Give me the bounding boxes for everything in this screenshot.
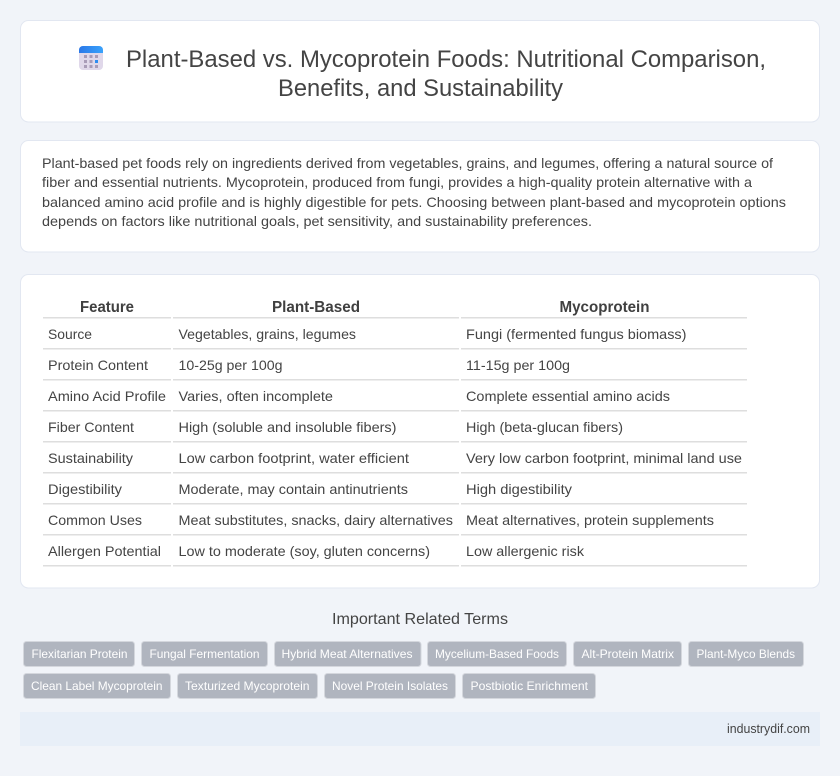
row: sustainability: Very low carbon footprint, minimal land use bbox=[466, 450, 742, 466]
title: Plant-Based vs. Mycoprotein Foods: Nutritional Comparison, bbox=[126, 46, 766, 73]
row: protein content bbox=[48, 357, 570, 373]
row: fiber content: Fiber Content bbox=[48, 419, 134, 435]
table header: Plant-Based bbox=[272, 299, 360, 316]
row: source: Fungi (fermented fungus biomass) bbox=[466, 326, 686, 342]
panel: title header bbox=[20, 20, 820, 122]
row: source: Source bbox=[48, 326, 92, 342]
related term chips: Clean Label Mycoprotein bbox=[31, 679, 162, 693]
related term chips: Mycelium-Based Foods bbox=[435, 647, 559, 661]
row: common uses bbox=[48, 512, 714, 528]
title bbox=[126, 46, 766, 102]
row: sustainability: Low carbon footprint, water efficient bbox=[178, 450, 409, 466]
row: common uses: Meat alternatives, protein supplements bbox=[466, 512, 714, 528]
row: sustainability: Sustainability bbox=[48, 450, 133, 466]
row: protein content: 11-15g per 100g bbox=[466, 357, 570, 373]
row: amino acid profile: Amino Acid Profile bbox=[48, 388, 166, 404]
row: source: Vegetables, grains, legumes bbox=[178, 326, 356, 342]
title: Benefits, and Sustainability bbox=[278, 75, 563, 102]
table header: Feature bbox=[80, 299, 134, 316]
table header bbox=[80, 299, 650, 316]
row: fiber content: High (soluble and insoluble fibers) bbox=[178, 419, 396, 435]
row: digestibility: High digestibility bbox=[466, 481, 572, 497]
row: common uses: Meat substitutes, snacks, dairy alternatives bbox=[178, 512, 453, 528]
row: protein content: Protein Content bbox=[48, 357, 148, 373]
row: common uses: Common Uses bbox=[48, 512, 142, 528]
related term chips: Fungal Fermentation bbox=[150, 647, 260, 661]
row: allergen potential: Low allergenic risk bbox=[466, 543, 585, 559]
related term chips: Texturized Mycoprotein bbox=[185, 679, 310, 693]
row: amino acid profile: Varies, often incomplete bbox=[178, 388, 333, 404]
row: amino acid profile bbox=[48, 388, 670, 404]
row: fiber content bbox=[48, 419, 623, 435]
related term chips: Hybrid Meat Alternatives bbox=[282, 647, 412, 661]
related term chips: Flexitarian Protein bbox=[32, 647, 128, 661]
panel: comparison table bbox=[20, 274, 820, 588]
related term chips bbox=[24, 642, 804, 698]
row: digestibility bbox=[48, 481, 572, 497]
footer bar: industrydif.com bbox=[727, 721, 810, 736]
icon: calendar bbox=[79, 46, 103, 70]
row: digestibility: Moderate, may contain antinutrients bbox=[178, 481, 408, 497]
footer bar bbox=[20, 712, 820, 746]
row: sustainability bbox=[48, 450, 742, 466]
related term chips: Alt-Protein Matrix bbox=[582, 647, 674, 661]
row: digestibility: Digestibility bbox=[48, 481, 122, 497]
intro paragraph: depends on factors like nutritional goals, pet sensitivity, and sustainability preferences. bbox=[42, 213, 592, 229]
row: protein content: 10-25g per 100g bbox=[178, 357, 282, 373]
intro paragraph: fiber and essential nutrients. Mycoprotein, produced from fungi, provides a high-quality protein alternative with a bbox=[42, 174, 752, 190]
row: source bbox=[48, 326, 686, 342]
row: allergen potential: Allergen Potential bbox=[48, 543, 161, 559]
heading: important related terms: Important Related Terms bbox=[332, 611, 508, 628]
table header: Mycoprotein bbox=[560, 299, 650, 316]
related term chips: Postbiotic Enrichment bbox=[470, 679, 589, 693]
row: allergen potential: Low to moderate (soy, gluten concerns) bbox=[178, 543, 430, 559]
row: fiber content: High (beta-glucan fibers) bbox=[466, 419, 623, 435]
row: amino acid profile: Complete essential amino acids bbox=[466, 388, 670, 404]
row: allergen potential bbox=[48, 543, 585, 559]
intro paragraph: balanced amino acid profile and is highly digestible for pets. Choosing between plant-based and mycoprotein options bbox=[42, 194, 786, 210]
panel: introduction bbox=[20, 140, 820, 252]
related term chips: Plant-Myco Blends bbox=[696, 647, 795, 661]
intro paragraph bbox=[42, 155, 786, 229]
related term chips: Novel Protein Isolates bbox=[332, 679, 448, 693]
intro paragraph: Plant-based pet foods rely on ingredients derived from vegetables, grains, and legumes, offering a natural source of bbox=[42, 155, 773, 171]
